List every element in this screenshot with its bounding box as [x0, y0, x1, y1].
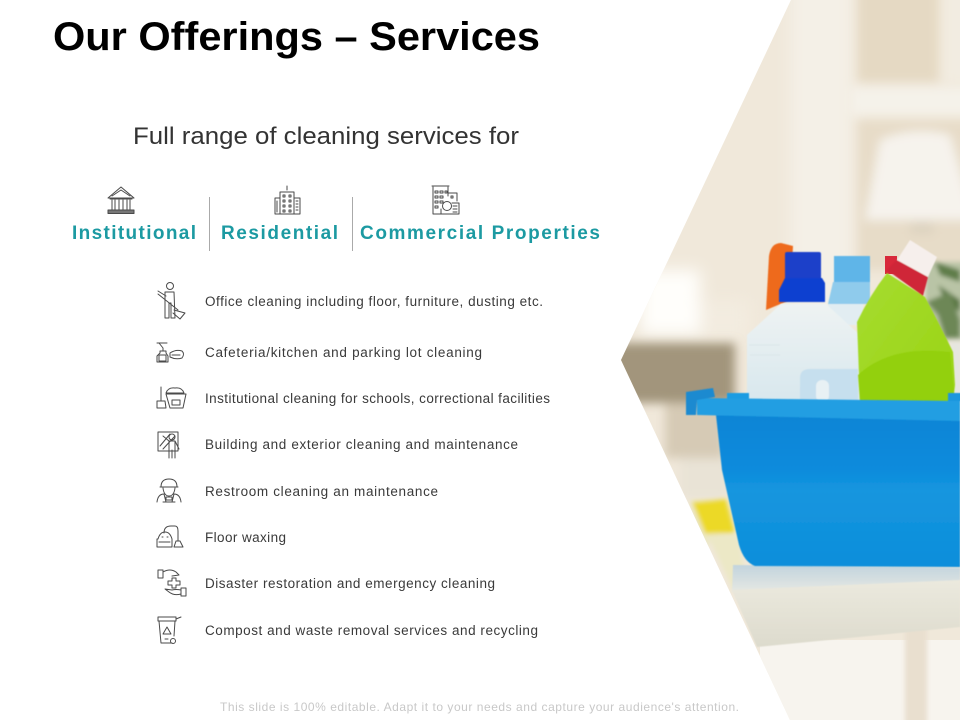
- orange bottle: [766, 243, 793, 310]
- footer note: This slide is 100% editable. Adapt it to your needs and capture your audience's attention.: [220, 700, 739, 714]
- yellow cloth: [690, 499, 748, 590]
- service: compost and waste removal: [158, 617, 538, 644]
- icon: apartment tower: [275, 186, 300, 214]
- icon: bucket and brush: [157, 387, 186, 408]
- green bottle: [857, 240, 955, 402]
- title: Our Offerings – Services: [53, 15, 540, 59]
- table: [732, 565, 960, 647]
- category: Institutional: [72, 187, 196, 244]
- blurred khaki object: [621, 336, 742, 465]
- icon: floor machine: [157, 526, 183, 547]
- service: restroom cleaning: [157, 479, 438, 502]
- post and floor below the table: [760, 640, 960, 720]
- white bottle: [747, 252, 860, 402]
- icon: worker with cap and mask: [157, 479, 181, 502]
- red cap behind: [885, 256, 897, 274]
- service: institutional cleaning: [157, 387, 550, 408]
- label: Institutional: Institutional: [72, 223, 196, 244]
- icon: janitor with broom: [158, 282, 185, 319]
- subtitle: Full range of cleaning services for: [133, 123, 519, 150]
- icon: bank building: [108, 187, 134, 214]
- basin: [686, 388, 960, 567]
- text: Institutional cleaning for schools, correctional facilities: [205, 391, 550, 406]
- service: disaster restoration: [158, 570, 495, 596]
- service: building exterior cleaning: [158, 432, 518, 458]
- category: Commercial Properties: [360, 186, 600, 244]
- plant: [925, 262, 960, 402]
- service: floor waxing: [157, 526, 286, 547]
- text: Office cleaning including floor, furniture, dusting etc.: [205, 294, 543, 309]
- label: Residential: Residential: [221, 223, 338, 244]
- icon: hands with medical cross: [158, 570, 186, 596]
- text: Building and exterior cleaning and maintenance: [205, 437, 518, 452]
- icon: recycling bin: [158, 617, 181, 644]
- text: Cafeteria/kitchen and parking lot cleaning: [205, 345, 482, 360]
- service: cafeteria cleaning: [157, 343, 482, 362]
- icon: spray bottle and sponge: [157, 343, 184, 362]
- label: Commercial Properties: Commercial Properties: [360, 223, 600, 244]
- icon: office buildings with coin: [432, 186, 459, 214]
- divider: [209, 197, 210, 251]
- icon: worker washing window: [158, 432, 179, 458]
- text: Floor waxing: [205, 530, 286, 545]
- text: Disaster restoration and emergency cleaning: [205, 576, 495, 591]
- blue bottle: [828, 256, 870, 325]
- divider: [352, 197, 353, 251]
- category: Residential: [221, 186, 338, 244]
- photo: cleaning supplies in a blue basin: [600, 0, 960, 720]
- text: Compost and waste removal services and recycling: [205, 623, 538, 638]
- text: Restroom cleaning an maintenance: [205, 484, 438, 499]
- service: office cleaning: [158, 282, 543, 319]
